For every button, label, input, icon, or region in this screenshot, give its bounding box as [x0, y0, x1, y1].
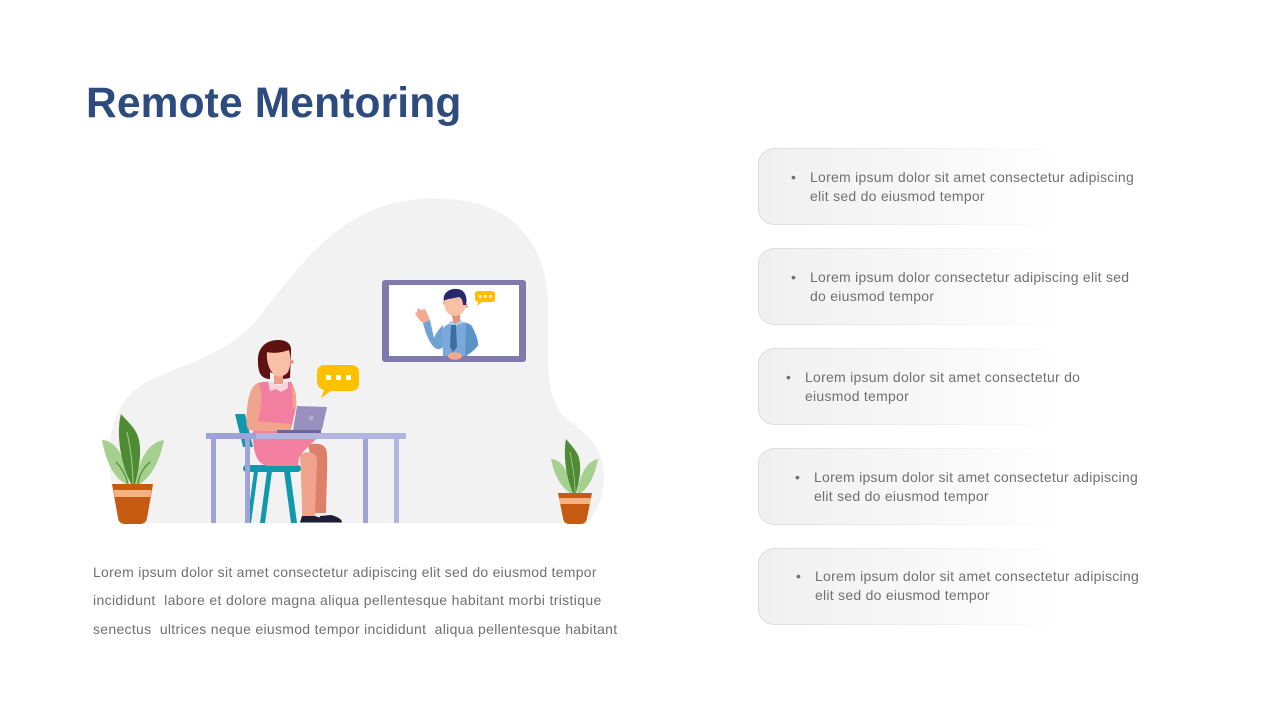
- card 1: [758, 148, 1098, 225]
- card 3: [758, 348, 1098, 425]
- desk top: [206, 433, 406, 439]
- desk legs: [211, 439, 368, 523]
- card 5: [758, 548, 1098, 625]
- card 4: •: [795, 469, 800, 485]
- chair: [235, 414, 317, 523]
- laptop: [277, 406, 327, 433]
- right plant: [551, 439, 598, 524]
- skirt: [253, 439, 316, 466]
- paragraph: incididunt labore et dolore magna aliqua pellentesque habitant morbi tristique: [93, 592, 602, 608]
- card 3: eiusmod tempor: [805, 388, 909, 404]
- card 1: •: [791, 169, 796, 185]
- back leg: [308, 444, 327, 513]
- card 4: elit sed do eiusmod tempor: [814, 488, 989, 504]
- paragraph: senectus ultrices neque eiusmod tempor incididunt aliqua pellentesque habitant: [93, 621, 617, 637]
- left plant: [102, 414, 164, 524]
- card 1: elit sed do eiusmod tempor: [810, 188, 985, 204]
- card 5: Lorem ipsum dolor sit amet consectetur adipiscing: [815, 568, 1139, 584]
- card 2: do eiusmod tempor: [810, 288, 934, 304]
- title: Remote Mentoring: [86, 80, 461, 127]
- card 4: [758, 448, 1098, 525]
- background blob: [109, 198, 604, 523]
- card 2: Lorem ipsum dolor consectetur adipiscing elit sed: [810, 269, 1129, 285]
- card 3: Lorem ipsum dolor sit amet consectetur do: [805, 369, 1080, 385]
- card 5: elit sed do eiusmod tempor: [815, 587, 990, 603]
- card 4: Lorem ipsum dolor sit amet consectetur adipiscing: [814, 469, 1138, 485]
- mentor speech bubble: [475, 291, 495, 306]
- card 5: •: [796, 568, 801, 584]
- paragraph: Lorem ipsum dolor sit amet consectetur adipiscing elit sed do eiusmod tempor: [93, 564, 597, 580]
- far desk leg: [394, 438, 399, 523]
- card 1: Lorem ipsum dolor sit amet consectetur adipiscing: [810, 169, 1134, 185]
- speech bubble: [317, 365, 359, 398]
- paragraph: [93, 564, 618, 637]
- back shoe: [318, 515, 342, 522]
- card 2: •: [791, 269, 796, 285]
- front shoe: [300, 516, 325, 522]
- mentor figure: [415, 289, 495, 360]
- screen: mentor video call: [382, 280, 526, 362]
- card 3: •: [786, 369, 791, 385]
- head and hair: [258, 340, 294, 392]
- left arm: [246, 383, 291, 431]
- far arm: [292, 384, 296, 408]
- front leg: [300, 452, 317, 517]
- torso: pink dress: [253, 382, 296, 433]
- card 2: [758, 248, 1098, 325]
